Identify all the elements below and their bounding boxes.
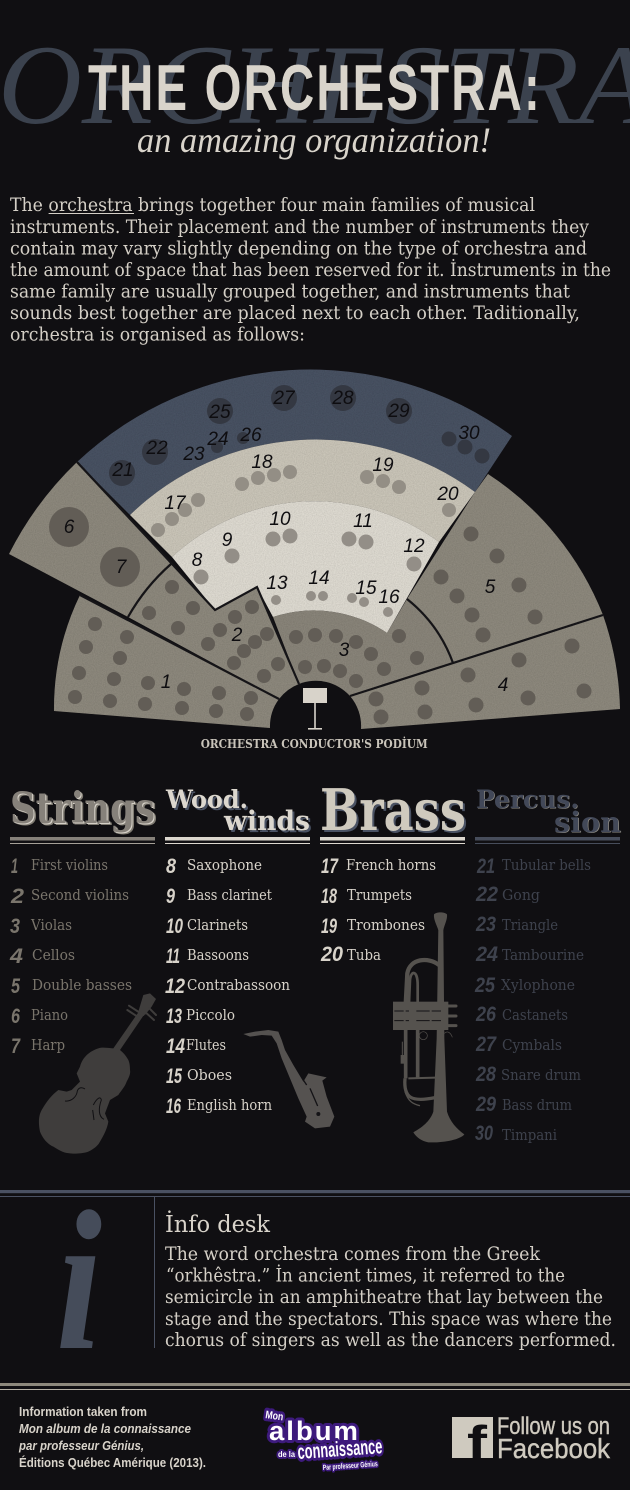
list: woodwinds: Contrabassoon (187, 976, 290, 994)
list: strings: 3 (10, 915, 20, 938)
seat numbers: 4 (498, 675, 508, 696)
seat numbers: 19 (372, 455, 394, 476)
list: woodwinds (165, 855, 290, 1118)
list: woodwinds: 13 (166, 1005, 182, 1028)
list: woodwinds: Flutes (186, 1036, 226, 1054)
logo: Mon album de la connaissance: connaissance (297, 1435, 383, 1464)
list: percussion: 29 (475, 1093, 496, 1116)
list: strings: 6 (11, 1005, 20, 1028)
icon: saxophone silhouette (243, 1030, 334, 1128)
icon: large letter i: i (56, 1171, 102, 1392)
section separators (77, 462, 603, 699)
list: brass: 18 (321, 885, 337, 908)
info desk text: “orkhêstra.” İn ancient times, it referred to the (166, 1264, 565, 1287)
seat numbers: 24 (206, 429, 229, 450)
icon: facebook (452, 1416, 493, 1468)
seat numbers: 16 (378, 587, 400, 608)
list: woodwinds: Bass clarinet (187, 886, 272, 904)
orchestra seating plan (9, 370, 620, 751)
list: brass: 20 (320, 943, 343, 966)
icon: violin silhouette (39, 993, 156, 1154)
title background word: ORCHESTRA (0, 23, 630, 148)
list: percussion: 25 (474, 974, 495, 997)
seat numbers: 27 (272, 388, 296, 409)
percussion seats (109, 385, 490, 486)
seat numbers: 25 (208, 402, 231, 423)
legend column: percussion (474, 785, 622, 1145)
seat numbers: 28 (331, 388, 354, 409)
list: woodwinds: 8 (166, 855, 176, 878)
list: strings: Piano (31, 1006, 68, 1024)
source credits (18, 1405, 206, 1470)
seat numbers: 30 (458, 423, 480, 444)
list: woodwinds: 16 (166, 1095, 181, 1118)
follow us text: Facebook (497, 1433, 611, 1464)
seat numbers (64, 388, 508, 696)
list: percussion: Tambourine (502, 946, 584, 964)
panel: info desk (0, 1171, 630, 1392)
list: brass (320, 855, 436, 966)
seat numbers: 5 (485, 577, 496, 598)
list: strings: Second violins (31, 886, 129, 904)
seat numbers: 6 (64, 517, 75, 538)
intro text block: instruments. Their placement and the number of instruments they (10, 217, 590, 238)
seat numbers: 18 (251, 452, 273, 473)
list: woodwinds: English horn (187, 1096, 272, 1114)
list: percussion: Triangle (502, 916, 558, 934)
list: woodwinds: 12 (165, 975, 185, 998)
list: brass: Trumpets (347, 886, 412, 904)
rule: percussion (475, 837, 620, 844)
list: percussion: Timpani (502, 1126, 557, 1144)
logo: Mon album de la connaissance (265, 1409, 383, 1472)
intro text block: contain may vary slightly depending on the type of orchestra and (10, 238, 587, 260)
list: strings (9, 855, 132, 1058)
list: strings: Double basses (32, 976, 132, 994)
list: strings: 5 (11, 975, 20, 998)
seat numbers: 3 (339, 640, 350, 661)
info desk text: The word orchestra comes from the Greek (165, 1244, 541, 1265)
heading: Strings: Strings (11, 785, 156, 835)
rule: woodwinds (165, 837, 310, 844)
list: woodwinds: Saxophone (187, 856, 262, 874)
list: woodwinds: Clarinets (187, 916, 248, 934)
list: brass: 17 (321, 855, 339, 878)
list: brass: 19 (321, 915, 337, 938)
seat numbers: 7 (116, 557, 128, 578)
legend column: woodwinds (165, 785, 312, 1118)
woodwind seats (194, 528, 422, 617)
list: percussion: 21 (476, 855, 495, 878)
list: percussion: Snare drum (501, 1066, 581, 1084)
list: percussion: Gong (502, 886, 540, 904)
seat numbers: 15 (355, 578, 377, 599)
intro text block: orchestra is organised as follows: (10, 324, 305, 346)
list: percussion: Castanets (502, 1006, 568, 1024)
heading: Woodwinds: winds (225, 808, 312, 839)
heading: Percussion: sion (554, 806, 621, 839)
seat numbers: 13 (266, 573, 288, 594)
rule: strings (10, 837, 155, 844)
heading: Woodwinds: Wood. (167, 787, 250, 816)
heading: Percussion (476, 785, 622, 840)
seat numbers: 21 (111, 460, 134, 481)
logo: Mon album de la connaissance: Mon (265, 1409, 284, 1424)
seat numbers: 22 (145, 438, 168, 459)
seat numbers: 17 (164, 493, 187, 514)
list: percussion: 27 (475, 1033, 497, 1056)
legend column: brass (320, 777, 468, 966)
list: brass: Trombones (347, 916, 425, 934)
list: strings: Cellos (32, 946, 75, 964)
list: percussion: Bass drum (502, 1096, 572, 1114)
list: woodwinds: Oboes (187, 1066, 232, 1084)
list: woodwinds: 9 (166, 885, 175, 908)
seat numbers: 29 (387, 401, 410, 422)
list: percussion: Xylophone (501, 976, 575, 994)
intro text block: same family are usually grouped together, and instruments that (10, 282, 571, 302)
source credits: Éditions Québec Amérique (2013). (19, 1455, 206, 1470)
icon: facebook: f (467, 1416, 488, 1468)
icon: conductor's podium stand (303, 688, 327, 730)
heading: Strings: Strings (10, 784, 155, 834)
source credits: Mon album de la connaissance (19, 1422, 191, 1436)
list: percussion: Tubular bells (502, 856, 591, 874)
seat numbers: 11 (353, 511, 373, 532)
legend column: strings (9, 784, 158, 1058)
list: percussion: 30 (475, 1122, 493, 1145)
sections of the plan (9, 370, 620, 729)
follow us text (497, 1413, 611, 1464)
list: brass: French horns (346, 856, 436, 874)
heading: Woodwinds: winds (223, 806, 310, 837)
list: percussion: 24 (475, 943, 498, 966)
list: percussion (474, 855, 591, 1145)
list: strings: 4 (9, 945, 23, 968)
seat numbers: 23 (182, 444, 205, 465)
seat numbers: 1 (161, 672, 171, 693)
list: percussion: 23 (475, 913, 496, 936)
source credits: par professeur Génius, (18, 1439, 144, 1453)
seat numbers: 9 (222, 530, 233, 551)
heading: Percussion: Percus. (476, 785, 579, 814)
list: percussion: 26 (475, 1003, 496, 1026)
heading: Strings: Strings (12, 786, 158, 836)
source credits: Information taken from (19, 1405, 147, 1419)
intro text block: sounds best together are placed next to each other. Taditionally, (10, 303, 580, 324)
heading: Woodwinds (165, 785, 312, 839)
seat numbers: 26 (239, 425, 262, 446)
subtitle: an amazing organization! (137, 120, 491, 160)
list: woodwinds: 15 (166, 1065, 182, 1088)
seat numbers: 10 (269, 509, 291, 530)
heading: Percussion: sion (555, 807, 622, 840)
list: strings: Harp (31, 1036, 65, 1054)
list: woodwinds: 14 (166, 1035, 185, 1058)
list: strings: 7 (11, 1035, 21, 1058)
icon: trumpet silhouette (393, 912, 464, 1142)
seat numbers: 2 (231, 625, 243, 646)
logo: Mon album de la connaissance: de la (278, 1450, 296, 1459)
seat numbers: 20 (436, 484, 459, 505)
seat numbers: 14 (308, 568, 330, 589)
list: strings: 2 (10, 885, 24, 908)
list: woodwinds: 11 (166, 945, 180, 968)
list: brass: Tuba (347, 946, 381, 964)
heading: Brass: Brass (322, 779, 468, 846)
footer rule (0, 1383, 630, 1390)
intro text block (10, 195, 611, 346)
list: percussion: Cymbals (502, 1036, 562, 1054)
podium label: ORCHESTRA CONDUCTOR'S PODİUM (201, 736, 428, 751)
rule: brass (320, 837, 465, 844)
info desk heading: İnfo desk (165, 1211, 271, 1238)
list: woodwinds: Piccolo (186, 1006, 235, 1024)
heading: Percussion: Percus. (477, 786, 580, 815)
list: strings: First violins (31, 856, 108, 874)
list: strings: 1 (11, 855, 18, 878)
intro text block: The orchestra brings together four main families of musical (10, 195, 535, 216)
logo: Mon album de la connaissance: album (269, 1416, 360, 1446)
list: percussion: 22 (475, 883, 498, 906)
list: percussion: 28 (475, 1063, 496, 1086)
seat numbers: 8 (192, 550, 203, 571)
seat numbers: 12 (403, 536, 425, 557)
list: strings: Violas (30, 916, 72, 934)
list: woodwinds: 10 (166, 915, 183, 938)
heading: Woodwinds: Wood. (165, 785, 248, 814)
logo: Mon album de la connaissance: Par professeur Génius (323, 1459, 378, 1472)
info desk text (165, 1244, 616, 1351)
string instrument seats (49, 507, 592, 724)
follow us text: Follow us on (497, 1413, 610, 1440)
list: woodwinds: Bassoons (187, 946, 249, 964)
heading: Brass: Brass (320, 777, 466, 844)
brass seats (151, 465, 456, 537)
